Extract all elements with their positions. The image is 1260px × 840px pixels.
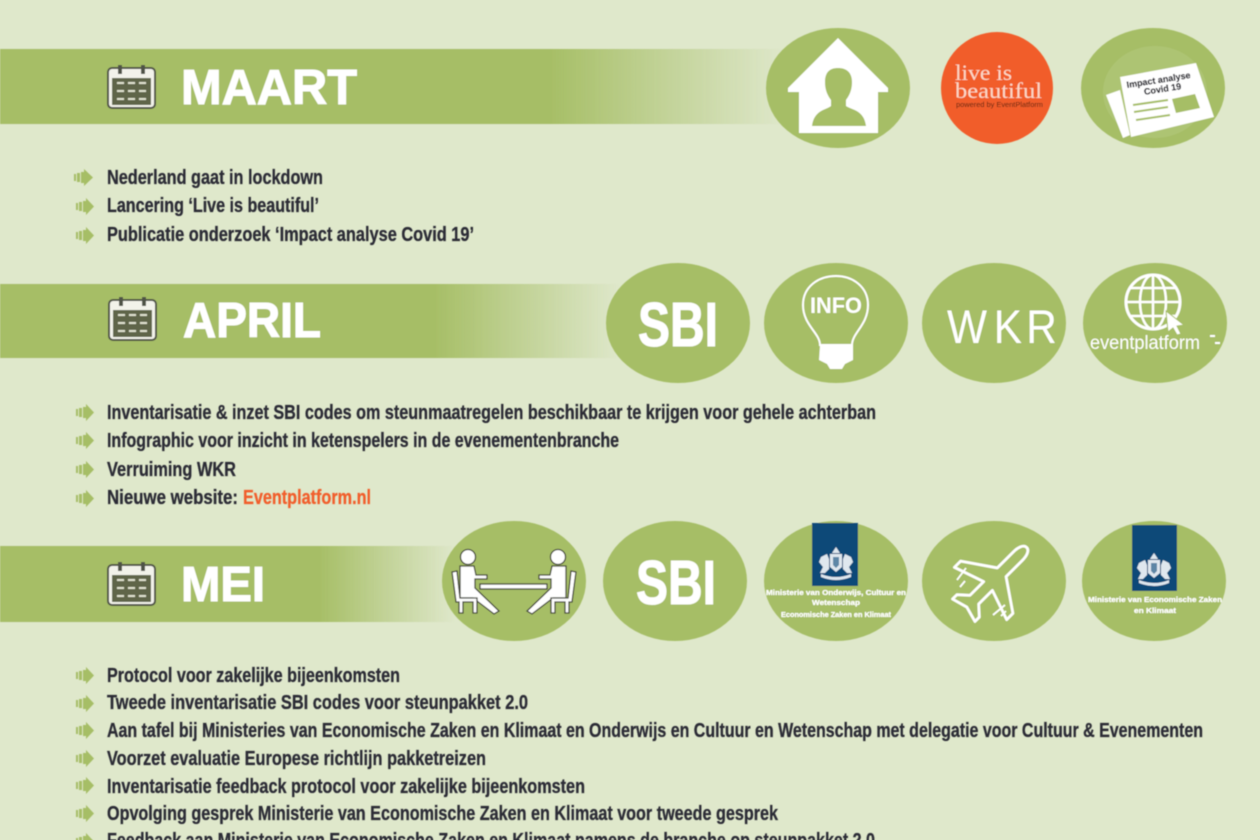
list item: Publicatie onderzoek ‘Impact analyse Covid 19’: [107, 223, 474, 246]
list item: Lancering ‘Live is beautiful’: [107, 194, 319, 217]
heading: mei: MEI: [181, 558, 265, 612]
icon: newspaper impact analyse: [1081, 28, 1225, 148]
list item: Nieuwe website:: [107, 486, 238, 509]
icon: ministerie EZK logo: [1082, 521, 1226, 641]
icon: ministerie OCW logo: [764, 521, 908, 641]
icon: ministerie EZK logo: Ministerie van Economische Zaken: [1088, 595, 1222, 604]
icon: live is beautiful logo: powered by EventPlatform: [956, 102, 1043, 109]
list item: Eventplatform.nl: [243, 486, 371, 509]
list item: Inventarisatie & inzet SBI codes om steunmaatregelen beschikbaar te krijgen voor gehele achterban: [107, 401, 876, 424]
icon: airplane: [922, 521, 1066, 641]
icon: SBI: [603, 521, 747, 641]
band: april: [0, 284, 620, 358]
icon: calendar maart: [108, 65, 155, 108]
list item: Opvolging gesprek Ministerie van Economische Zaken en Klimaat voor tweede gesprek: [107, 802, 778, 825]
icon: newspaper impact analyse: Impact analyse: [1126, 70, 1191, 90]
list item: Tweede inventarisatie SBI codes voor steunpakket 2.0: [107, 691, 528, 714]
section: maart: [0, 28, 1225, 246]
heading: april: APRIL: [183, 294, 321, 348]
list item: Verruiming WKR: [107, 458, 236, 481]
list item: Infographic voor inzicht in ketenspelers in de evenementenbranche: [107, 429, 619, 452]
bullets: april: [76, 401, 876, 509]
list item: Nederland gaat in lockdown: [107, 166, 323, 189]
icon: live is beautiful logo: [941, 32, 1053, 144]
list item: [76, 486, 371, 509]
bullets: maart: [74, 166, 474, 246]
icon: info bulb: [764, 263, 908, 383]
icon: live is beautiful logo: beautiful: [955, 78, 1042, 103]
icon: ministerie OCW logo: Ministerie van Onderwijs, Cultuur en: [766, 588, 906, 597]
icon: SBI: SBI: [638, 291, 718, 360]
band: maart: [0, 49, 785, 124]
icon: SBI: [606, 263, 750, 383]
band: mei: [0, 546, 455, 622]
list item: Protocol voor zakelijke bijeenkomsten: [107, 664, 400, 687]
section: mei: [0, 521, 1226, 840]
icon: newspaper impact analyse: Covid 19: [1143, 81, 1182, 97]
icon: meeting at table: [442, 521, 586, 641]
icon: calendar april: [109, 297, 156, 340]
list item: Inventarisatie feedback protocol voor zakelijke bijeenkomsten: [107, 775, 585, 798]
icon: SBI: SBI: [636, 549, 716, 618]
icon: WKR: [922, 263, 1066, 383]
icon: calendar mei: [108, 562, 155, 605]
list item: Voorzet evaluatie Europese richtlijn pakketreizen: [107, 747, 486, 770]
icon: house with person: [766, 28, 910, 148]
section: april: [0, 263, 1227, 509]
icon: eventplatform globe: [1083, 263, 1227, 383]
icon: WKR: WKR: [947, 302, 1057, 354]
icon: ministerie OCW logo: Wetenschap: [812, 598, 860, 607]
icon: live is beautiful logo: live is: [955, 60, 1012, 85]
icon: ministerie EZK logo: en Klimaat: [1134, 606, 1177, 615]
icon: ministerie OCW logo: Economische Zaken en Klimaat: [781, 610, 891, 619]
heading: maart: MAART: [181, 61, 357, 115]
bullets: mei: [76, 664, 1203, 840]
icon: info bulb: INFO: [810, 293, 862, 318]
icon: eventplatform globe: eventplatform: [1090, 333, 1200, 354]
list item: [76, 458, 236, 481]
